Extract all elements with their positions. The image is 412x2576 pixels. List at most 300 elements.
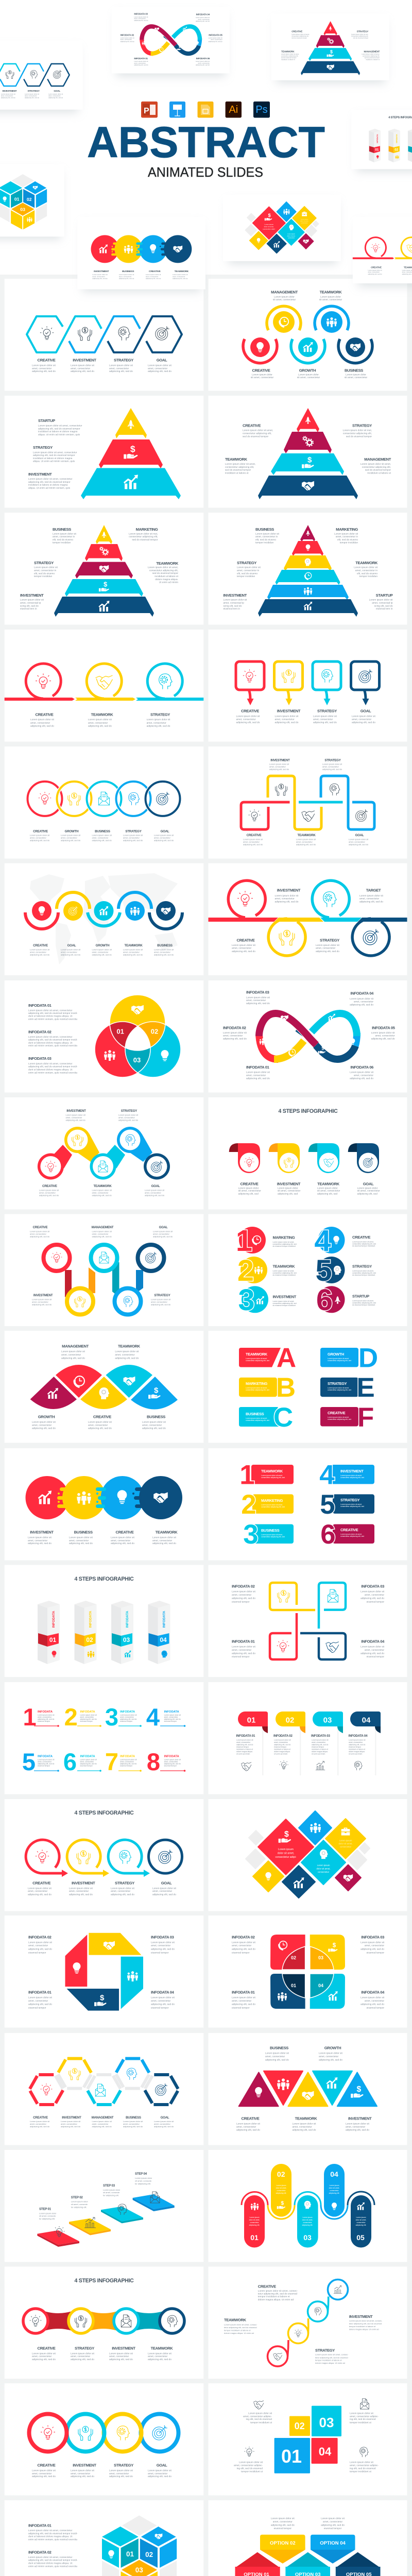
text: INFODATA 03: dunt ut laboreet dolore magna aliqua. Ut (28, 1069, 73, 1072)
text: MARKETING: Lorem ipsum dolor sit met, (129, 533, 158, 536)
text: INFODATA 06: amet, consectetur (354, 1074, 373, 1077)
text: CREATIVE: amet, consectetur (243, 841, 260, 843)
text: INVESTMENT: INVESTMENT (277, 709, 301, 714)
text: CREATIVE: Lorem ipsum dolor sit (39, 1189, 59, 1191)
number 02: 02 (277, 2170, 285, 2178)
text: INVESTMENT: amet, consectetur (66, 1116, 82, 1119)
text: INFODATA 03: Lorem ipsum dolor sit (246, 996, 270, 999)
numeral 5: 5 (320, 1489, 335, 1520)
number 03: 03 (133, 1056, 141, 1064)
text: TEAMWORK: TEAMWORK (273, 1264, 295, 1269)
text: INVESTMENT: adipiscing elit, sed do (275, 721, 299, 724)
text: STEP 04: sit amet, consecte (135, 2179, 152, 2182)
text: GROWTH: adipiscing elit, sed do (32, 1427, 56, 1430)
text: GOAL: Lorem ipsum dolor sit (154, 2120, 174, 2123)
text: TEAMWORK: tempor incididun (359, 575, 377, 578)
text: TEAMWORK: TEAMWORK (261, 1469, 283, 1473)
number 01: 01 (116, 1027, 124, 1036)
text: CREATIVE: adipiscing elit, sed do (30, 725, 54, 728)
text: TEAMWORK: TEAMWORK (151, 2346, 173, 2351)
icon: hands (284, 1158, 294, 1167)
hero: collage card, infinity (112, 7, 230, 76)
text: TEAMWORK: amet, consectetur (296, 841, 313, 843)
number 03: 03 (323, 1716, 332, 1725)
icon: handshake (131, 1005, 144, 1014)
text: MANAGEMENT: Lorem ipsum dolor (274, 296, 295, 299)
chart: digits: 4 (146, 1703, 160, 1731)
icon: rocket (101, 532, 107, 538)
icon: target (156, 326, 169, 340)
text: CREATIVE: CREATIVE (32, 1881, 50, 1886)
text: MANAGEMENT: MANAGEMENT (62, 1344, 89, 1349)
text: GOAL: amet, consectetur (148, 367, 168, 370)
text: INFODATA 01: Lorem ipsum dolor sit amet, consectetur (28, 1009, 73, 1012)
letter A: A (277, 1343, 296, 1374)
text: GOAL: adipiscing elit, sed do (145, 1194, 165, 1196)
text: INFODATA 01: Ut enim ad minim (236, 1753, 250, 1755)
text: pill 1: Lorem ipsum (249, 2216, 260, 2218)
icon: head (334, 1266, 341, 1275)
text: STRATEGY: sed do eiusmod tempor (346, 435, 372, 438)
text: STRATEGY: Lorem ipsum dolor sit (123, 834, 143, 837)
icon: hands (69, 2069, 80, 2080)
text: CREATIVE: Lorem ipsum dolor (252, 374, 272, 377)
text: CREATIVE: Lorem ipsum dolor sit (32, 2469, 56, 2472)
text: CREATIVE: amet, consectetur (28, 1890, 48, 1893)
panel: five tier pyramid (5, 513, 203, 624)
text: CREATIVE: CREATIVE (37, 358, 56, 363)
numeral 1: 1 (239, 1460, 255, 1490)
text: STRATEGY: adipiscing elit, sed do (123, 839, 143, 842)
text: CREATIVE: adipiscing elit, sed do (32, 2475, 56, 2478)
text: TEAMWORK: Lorem ipsum dolor sit (123, 948, 143, 951)
icon: mail (328, 1589, 338, 1602)
text: INFODATA 02: Lorem ipsum dolor sit amet, consectetur (28, 1036, 73, 1039)
text: INFODATA 04: Ut enim ad minim (349, 1753, 363, 1755)
number 04: 04 (330, 2170, 338, 2178)
icon: bulb (265, 1872, 271, 1880)
text: lower left note: Lorem ipsum dolor sit (239, 2461, 263, 2464)
text: INFODATA 02: amet, consectetur (274, 1741, 288, 1743)
chart: triangles (239, 2071, 377, 2106)
hero: collage card, ribbon loops (353, 217, 412, 286)
icon: dollar hand (279, 1830, 291, 1843)
text: BUSINESS: BUSINESS (53, 527, 71, 532)
chart: column 4: 04 (160, 1636, 167, 1643)
text: TEAMWORK: amet, consectetur (148, 2355, 168, 2358)
text: INFODATA 03: adipiscing elit, sed do (151, 1948, 175, 1951)
text: INFODATA 02: enim ad minim veniam, quis nostrud exercita (28, 2565, 77, 2568)
text: STRATEGY: elit, sed do eiusmo (34, 572, 55, 575)
text: TEAMWORK: amet, consectetur (115, 1353, 135, 1357)
text: BUSINESS: Lorem ipsum dolor sit amet, (246, 1417, 267, 1419)
text: INFODATA 03: adipiscing elit, sed do (360, 1948, 384, 1951)
text: INFODATA 01: INFODATA 01 (236, 1734, 255, 1738)
icon: chart (124, 1651, 131, 1657)
text: INFODATA 02: INFODATA 02 (28, 1935, 52, 1939)
text: INFODATA 01: Lorem ipsum dolor sit (246, 1071, 270, 1074)
text: INFODATA 04: adipiscing elit, sed do (349, 1743, 366, 1745)
panel: letters A to F (208, 1331, 407, 1443)
icon: bulb (40, 326, 54, 340)
app icon: PowerPoint: P (144, 107, 149, 115)
vertical label 2: INFODATA (89, 1611, 93, 1628)
text: TEAMWORK: Lorem ipsum dolor sit (115, 1350, 139, 1353)
text: STRATEGY: Lorem ipsum dolor sit amet, (352, 1270, 374, 1272)
text: MARKETING: sed do eiusmod tempor (132, 538, 158, 541)
icon: phone clock (280, 317, 288, 327)
text: INFODATA 01: adipiscing elit, sed do eiusmod tempor incidi- (28, 1012, 78, 1015)
text: TEAMWORK: TEAMWORK (93, 1184, 112, 1188)
text: CREATIVE: CREATIVE (93, 1415, 111, 1419)
icon: head (118, 2204, 127, 2215)
text: pill 1: adipiscing elit. (249, 2224, 260, 2226)
text: BUSINESS: adipiscing elit, sed do (123, 2125, 143, 2128)
icon: briefcase (341, 1828, 350, 1835)
text: INFODATA 01: adipiscing elit, sed do eiusmod tempor incidi- (28, 2532, 78, 2535)
text: INFODATA 5: INFODATA (38, 1755, 53, 1758)
text: STRATEGY: Lorem ipsum dolor sit amet, (328, 1387, 349, 1389)
text: INFODATA 02: Ut enim ad minim (274, 1753, 288, 1755)
text: TEAMWORK: dolore magna aliqua. Ut enim ad (224, 2332, 254, 2334)
text: INFODATA 05: amet, consectetur (375, 1035, 395, 1038)
text: CREATIVE: Lorem ipsum dolor sit (30, 718, 55, 721)
hero: collage card, diamonds (223, 195, 341, 264)
text: CREATIVE: dolore magna aliqua. Ut enim ad (258, 2298, 294, 2301)
text: INFODATA 2: eiusmod tempor (80, 1720, 93, 1722)
text: GOAL: amet, consectetur (153, 1232, 169, 1235)
text: STEP 04: tur adipiscing elit. (135, 2182, 151, 2185)
text: GOAL: GOAL (360, 709, 371, 714)
number 05: 05 (356, 2233, 365, 2242)
text: CREATIVE: Lorem ipsum dolor sit amet, (243, 429, 273, 432)
panel: overlapping rings (5, 2383, 203, 2496)
text: TEAMWORK: sed do eiusmod tempor (225, 469, 251, 472)
text: INFODATA 7: Lorem ipsum dolor sit (120, 1759, 136, 1761)
panel: sector wave (5, 1331, 203, 1443)
text: STRATEGY: STRATEGY (114, 2463, 133, 2468)
text: GOAL: adipiscing elit, sed do (61, 953, 81, 956)
panel: connected rings (5, 2267, 203, 2379)
text: INFODATA 8: eiusmod tempor (164, 1765, 177, 1767)
icon: target (159, 1850, 173, 1863)
text: TEAMWORK: Ut enim ad minim (159, 581, 178, 584)
chart: sectors (30, 1365, 178, 1410)
icon: handshake (124, 1377, 135, 1385)
text: pill 2: adipiscing elit. (276, 2192, 286, 2194)
icon: hands (78, 2426, 93, 2441)
text: pill 3: dolor sit amet, (302, 2219, 313, 2221)
text: BUSINESS: adipiscing elit, sed do (142, 1427, 166, 1430)
icon: hands (78, 327, 92, 341)
numeral 5: 5 (315, 1254, 332, 1287)
text: INFODATA 04: INFODATA 04 (361, 1639, 385, 1643)
text: pill 4: Lorem ipsum (329, 2184, 339, 2187)
text: CREATIVE: CREATIVE (243, 423, 261, 428)
text: INFODATA 5: Lorem ipsum dolor sit (38, 1759, 54, 1761)
text: CREATIVE: CREATIVE (37, 2346, 56, 2351)
text: BUSINESS: consectetur adipiscing elit, sed (261, 1536, 285, 1538)
text: STEP 02: sit amet, consecte (71, 2203, 88, 2206)
text: TEAMWORK: TEAMWORK (91, 712, 113, 717)
text: INFODATA 02: INFODATA 02 (232, 1935, 255, 1939)
text: BUSINESS: adipiscing elit, sed do (154, 953, 174, 956)
hero: collage card, joined circles (77, 217, 205, 292)
chart: overlapping rings (29, 2414, 178, 2451)
icon: chart (99, 601, 109, 612)
text: STRATEGY: adipiscing elit, sed do (71, 2358, 94, 2361)
icon: dollar hand (99, 581, 109, 591)
panel: four tier pyramid (208, 396, 407, 508)
number 01: 01 (291, 1983, 296, 1988)
panel: hexagon honeycomb (5, 2033, 203, 2145)
text: INFODATA 8: INFODATA (164, 1755, 179, 1758)
icon: target (157, 792, 169, 805)
chart: rings with arrows (26, 1840, 182, 1877)
icon: chart (256, 1296, 264, 1304)
text: STRATEGY: STRATEGY (237, 561, 256, 565)
text: INFODATA 03: Lorem ipsum dolor sit (312, 1739, 328, 1741)
text: CREATIVE: Lorem ipsum dolor sit (236, 2123, 261, 2126)
hero: collage card, cube (0, 164, 64, 239)
panel: square snake (208, 747, 407, 858)
panel: isometric steps (5, 2150, 203, 2262)
text: STEP 01: tur adipiscing elit. (39, 2217, 55, 2220)
text: MARKETING: Lorem ipsum dolor sit amet, (261, 1504, 283, 1506)
text: STARTUP: eiusmod tem in (376, 607, 393, 611)
text: INVESTMENT: INVESTMENT (62, 2116, 81, 2120)
text: CREATIVE: amet, consectetur (111, 1539, 131, 1543)
panel: 3D columns (5, 1565, 203, 1677)
icon: head (117, 2426, 129, 2441)
text: TEAMWORK: sit amet, consectetur (317, 1190, 340, 1193)
text: MANAGEMENT: Lorem ipsum dolor sit (61, 1350, 85, 1353)
chart: digits: 7 (105, 1748, 118, 1775)
text: CREATIVE: Lorem ipsum dolor sit amet, (328, 1416, 349, 1418)
text: STEP 02: STEP 02 (71, 2196, 83, 2199)
icon: gears (100, 547, 108, 555)
icon: head (162, 1651, 167, 1657)
text: INFODATA 02: dunt ut laboreet dolore magna aliqua. Ut (28, 1042, 73, 1045)
chart: folded tags (229, 1143, 379, 1173)
icon: bulb (243, 669, 256, 682)
text: INFODATA 01: Lorem ipsum dolor sit (28, 1996, 53, 1999)
text: INVESTMENT: INVESTMENT (348, 2116, 372, 2121)
text: STEP 01: sit amet, consecte (39, 2215, 56, 2217)
icon: handshake (99, 565, 109, 572)
text: TEAMWORK: amet, consectetur (123, 951, 140, 953)
text: GOAL: amet, consectetur (352, 718, 372, 721)
text: TEAMWORK: TEAMWORK (297, 834, 316, 837)
text: INFODATA 02: adipiscing elit, sed do (274, 1743, 291, 1745)
text: STRATEGY: amet, consectetur (313, 718, 333, 721)
text: STARTUP: scing elit, sed do (374, 604, 393, 607)
text: INFODATA 03: eiusmod tempor (367, 1952, 384, 1955)
hero: collage card, hexagons (0, 41, 83, 112)
icon: target (151, 1161, 163, 1172)
text: CREATIVE: adipiscing elit, sed do (232, 950, 255, 953)
text: STRATEGY: tempor incididunt ut labore et (315, 2359, 342, 2362)
chart: wave line (242, 2192, 374, 2219)
text: STARTUP: amet, consectad ip (372, 602, 393, 605)
panel: isometric cube (5, 2500, 203, 2576)
text: GOAL: Lorem ipsum dolor sit (148, 2469, 172, 2472)
text: CREATIVE: adipiscing elit, sed do (28, 1893, 52, 1896)
text: pill 5: dolor sit amet, (356, 2219, 366, 2221)
text: STRATEGY: consectetur adipiscing elit, sed (328, 1389, 351, 1391)
text: INFODATA 04: INFODATA 04 (350, 991, 374, 996)
text: INVESTMENT: amet, consectetur (71, 367, 91, 370)
number 02: 02 (295, 2421, 305, 2431)
text: CREATIVE: CREATIVE (247, 834, 262, 837)
number 04: 04 (318, 1983, 323, 1988)
text: GROWTH: Lorem ipsum dolor sit (319, 2052, 343, 2055)
text: STRATEGY: Lorem ipsum dolor sit (316, 944, 340, 947)
text: TEAMWORK: consectetur adipiscing elit, sed (246, 1360, 269, 1362)
text: BUSINESS: elit, sed do eiusmo (255, 538, 276, 541)
text: BUSINESS: consectetur adipiscing elit, sed (246, 1419, 269, 1421)
text: INFODATA 03: INFODATA 03 (361, 1584, 384, 1589)
text: pill 4: consectetur (330, 2190, 339, 2192)
text: INVESTMENT: INVESTMENT (73, 2463, 96, 2468)
icon: handshake (301, 811, 315, 822)
text: BUSINESS: Lorem ipsum dolor sit (123, 2120, 143, 2123)
chart: tiles (270, 1935, 345, 2009)
numeral 6: 6 (316, 1283, 333, 1317)
text: BUSINESS: BUSINESS (74, 1530, 93, 1534)
text: BUSINESS: BUSINESS (270, 2046, 288, 2050)
text: INVESTMENT: Lorem ipsum dolor sit (66, 1114, 86, 1116)
panel: teardrop chain (5, 1097, 203, 1210)
text: INFODATA 03: adipiscing elit, sed do eiusmod tempor incidi- (28, 1065, 78, 1069)
text: BUSINESS: BUSINESS (126, 2116, 141, 2120)
text: INFODATA 6: INFODATA (80, 1755, 95, 1758)
text: INFODATA 03: INFODATA 03 (246, 990, 269, 995)
panel: octagon pieces (5, 1916, 203, 2028)
text: GOAL: GOAL (363, 1182, 374, 1187)
text: TEAMWORK: elit, sed do eiusmo (357, 572, 377, 575)
number 02: 02 (291, 1955, 296, 1960)
text: INFODATA 03: Lorem ipsum dolor sit (360, 1941, 385, 1944)
text: TEAMWORK: TEAMWORK (224, 2318, 247, 2323)
text: CREATIVE: CREATIVE (33, 829, 48, 834)
text: INVESTMENT: adipiscing elit, sed (278, 1193, 298, 1196)
text: TEAMWORK: adipiscing elit, sed do (152, 1542, 176, 1545)
text: INFODATA 8: Lorem ipsum dolor sit (164, 1759, 181, 1761)
text: INFODATA 04: amet, consectetur (349, 1741, 363, 1743)
chart: digits (22, 1703, 160, 1775)
icon: dollar hand (94, 1993, 107, 2006)
text: STRATEGY: consectetur adipiscing elit, sed (340, 1505, 364, 1507)
text: upper left note: ing elit, sed do eiusmod (246, 2418, 272, 2421)
text: GOAL: sit amet, consectetur (357, 1190, 380, 1193)
icon: bulb (39, 906, 45, 916)
text: INFODATA 01: adipiscing elit, sed do (232, 1652, 255, 1655)
text: INFODATA 01: Lorem ipsum dolor sit amet, consectetur (28, 2529, 73, 2532)
text: CREATIVE: Lorem ipsum dolor sit (243, 838, 263, 841)
text: STRATEGY: Lorem ipsum dolor sit (322, 762, 342, 766)
text: GROWTH: Lorem ipsum dolor sit (32, 1421, 56, 1424)
icon: rocket (305, 417, 311, 424)
text: red diamond: Lorem ipsum (278, 1848, 294, 1851)
text: TEAMWORK: adipiscing elit, sed do (148, 2358, 171, 2361)
text: INVESTMENT: INVESTMENT (30, 1530, 54, 1534)
text: INFODATA 1: eiusmod tempor (38, 1720, 50, 1722)
text: pill 3: consectetur (303, 2222, 312, 2224)
text: INFODATA 04: amet, consectetur (354, 1001, 373, 1004)
text: INVESTMENT: INVESTMENT (277, 888, 301, 893)
text: CREATIVE: Lorem ipsum dolor (238, 1187, 259, 1190)
text: BUSINESS: BUSINESS (246, 1412, 264, 1416)
icon: dollar hand (351, 2085, 363, 2098)
text: STARTUP: consectetur adipiscing elit, sed (352, 1302, 376, 1304)
numeral 4: 4 (319, 1460, 335, 1490)
text: GOAL: GOAL (355, 834, 364, 837)
text: INVESTMENT: adipiscing elit, sed do (275, 901, 299, 904)
text: pill 1: dolor sit amet, (249, 2219, 260, 2221)
text: INFODATA 03: amet, consectetur (246, 999, 266, 1002)
panel: ribbon loops (5, 630, 203, 742)
chart: banners (238, 1711, 381, 1733)
label: OPTION 04: OPTION 04 (320, 2540, 346, 2546)
text: BUSINESS: amet, consectetur (142, 1424, 162, 1427)
text: INFODATA 03: adipiscing elit, sed do (246, 1002, 270, 1005)
text: INFODATA 7: eiusmod tempor (120, 1765, 133, 1767)
text: CREATIVE: CREATIVE (42, 1184, 57, 1188)
text: TEAMWORK: sit amet, consectetur (319, 298, 342, 301)
icon: bulb (279, 1760, 288, 1769)
text: TEAMWORK: Lorem ipsum dolor (317, 1187, 338, 1190)
text: CREATIVE: CREATIVE (241, 709, 259, 714)
text: pill 5: adipiscing elit. (356, 2224, 366, 2226)
text: CREATIVE: Lorem ipsum dolor sit (28, 1887, 52, 1890)
vertical label 3: INFODATA (126, 1611, 129, 1628)
text: GOAL: adipiscing elit, sed do (154, 2125, 174, 2128)
text: INFODATA 03: INFODATA 03 (311, 1734, 330, 1738)
text: INFODATA 06: Lorem ipsum dolor sit (350, 1071, 374, 1074)
text: TEAMWORK: amet, consectetur (88, 721, 108, 724)
text: GROWTH: sit amet, consectetur (297, 376, 320, 379)
icon: chart (38, 1490, 52, 1504)
number 04: 04 (362, 1716, 371, 1725)
icon: head (322, 669, 333, 683)
text: INVESTMENT: amet, consectetur (269, 766, 286, 768)
text: INFODATA 02: INFODATA 02 (223, 1025, 246, 1030)
text: BUSINESS: Lorem ipsum dolor sit (255, 533, 280, 536)
text: INFODATA 01: incididunt ut labore et (236, 1749, 253, 1751)
hero: collage card, pyramid (271, 14, 389, 83)
text: CREATIVE: CREATIVE (352, 1235, 370, 1240)
text: STARTUP: aliqua. Ut enim ad minim veniam, quis (38, 433, 80, 436)
text: INFODATA 02: eiusmod tempor (28, 1952, 46, 1955)
icon: phone clock (75, 1376, 84, 1387)
panel: diagonal teardrop rings (208, 2267, 407, 2379)
text: INFODATA 03: amet, consectetur (151, 1944, 171, 1947)
text: STRATEGY: adipiscing elit, sed do (118, 1119, 139, 1121)
text: pill 1: consectetur (250, 2222, 259, 2224)
text: INFODATA 04: eiusmod tempor (367, 1655, 384, 1658)
label: OPTION 02: OPTION 02 (270, 2540, 296, 2546)
text: INVESTMENT: adipiscing elit, sed do (28, 1542, 52, 1545)
text: BUSINESS: Lorem ipsum dolor sit (92, 834, 112, 837)
text: INVESTMENT: amet, consectetur (346, 2126, 366, 2129)
icon: handshake (323, 1159, 334, 1167)
text: INFODATA 02: amet, consectetur (232, 1594, 252, 1597)
text: INVESTMENT: Lorem ipsum dolor sit (32, 1298, 52, 1300)
text: STRATEGY: Lorem ipsum dolor sit (34, 566, 58, 569)
chart: octagon pieces (65, 1933, 143, 2011)
text: INVESTMENT: amet, consectetur (275, 718, 295, 721)
